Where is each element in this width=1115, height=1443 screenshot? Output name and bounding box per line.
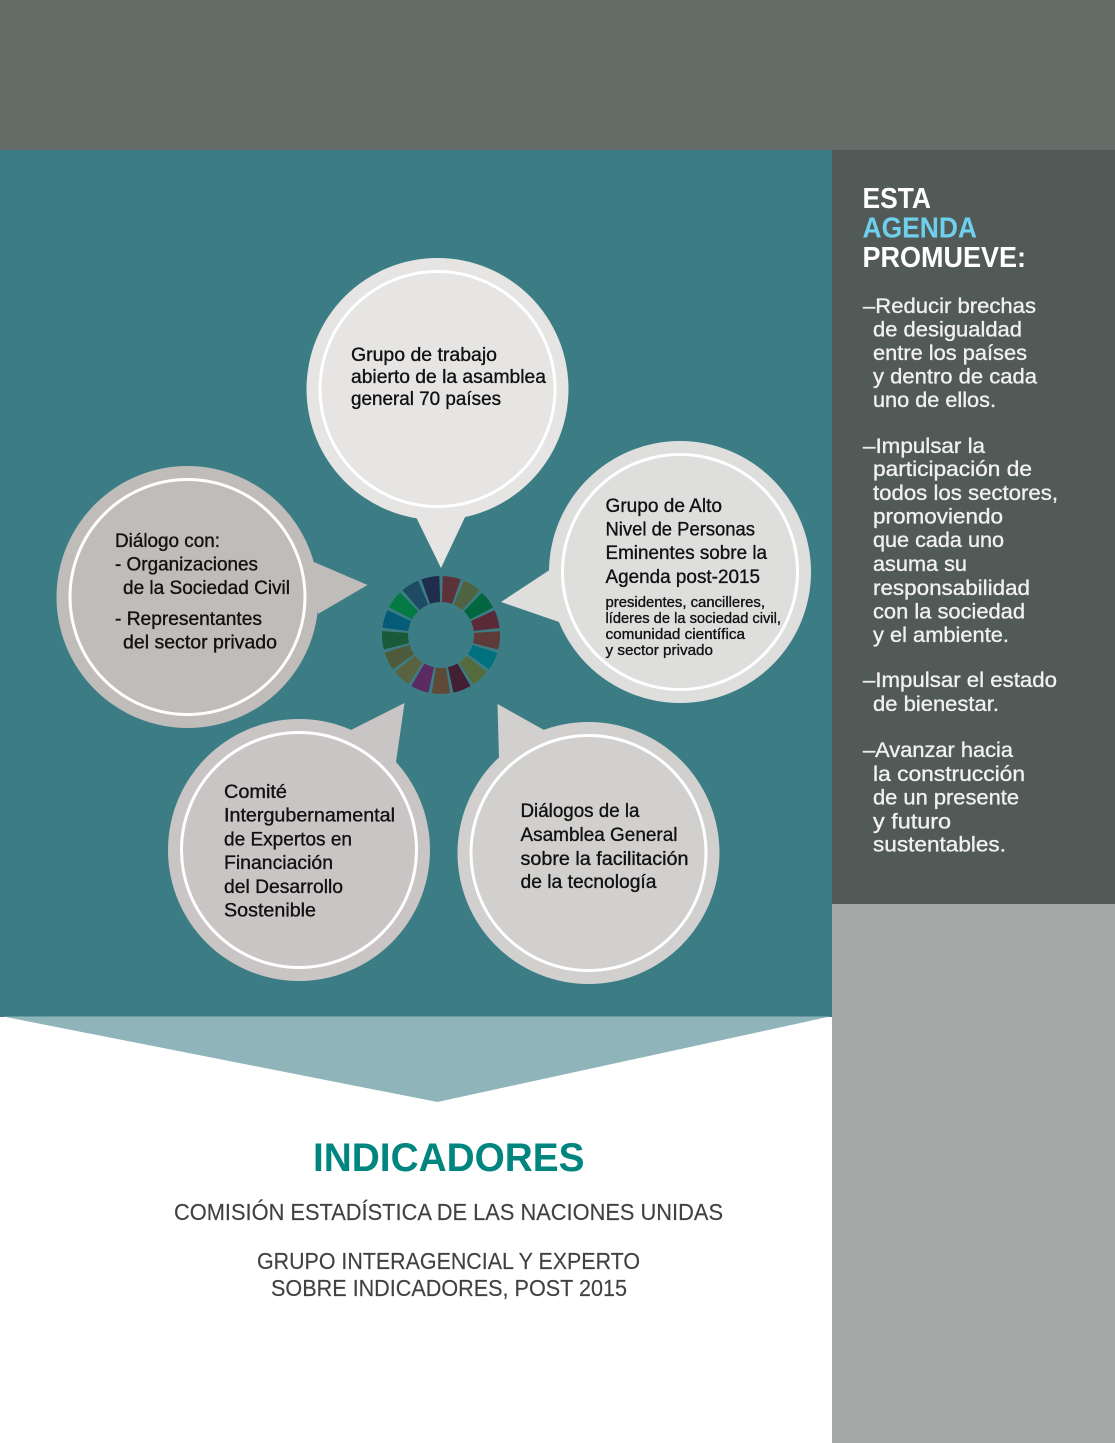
lower right grey panel <box>832 904 1115 1443</box>
sidebar item: avanzar hacia: –Avanzar hacia <box>863 738 1013 762</box>
sidebar item: impulsar la participacion: participación de <box>873 457 1032 481</box>
sidebar item: impulsar el estado: de bienestar. <box>873 692 999 716</box>
sidebar item: impulsar la participacion <box>863 434 1058 647</box>
sidebar item: avanzar hacia: la construcción <box>873 762 1025 786</box>
sidebar item: impulsar la participacion: responsabilidad <box>873 576 1030 600</box>
text: dialogos de la asamblea general: de la tecnología <box>520 871 657 893</box>
text: dialogos de la asamblea general: Diálogos de la <box>520 800 640 822</box>
text: comite intergubernamental: Sostenible <box>224 900 316 922</box>
sidebar item: impulsar la participacion: promoviendo <box>873 504 1003 528</box>
text: grupo interagencial: SOBRE INDICADORES, POST 2015 <box>271 1275 627 1301</box>
top band <box>0 0 1115 150</box>
text: dialogo con: - Organizaciones <box>115 554 258 576</box>
text: grupo de trabajo: Grupo de trabajo <box>351 344 497 366</box>
sidebar item: reducir brechas: –Reducir brechas <box>863 294 1036 318</box>
sidebar item: impulsar la participacion: asuma su <box>873 552 967 576</box>
text: dialogo con <box>115 530 290 654</box>
sidebar item: impulsar la participacion: –Impulsar la <box>863 434 985 458</box>
sidebar item: impulsar la participacion: con la sociedad <box>873 600 1025 624</box>
sidebar heading: PROMUEVE: <box>862 242 1026 274</box>
sidebar item: impulsar el estado <box>863 668 1057 716</box>
arrow: downward triangle <box>3 1016 830 1102</box>
sidebar item: avanzar hacia: de un presente <box>873 786 1019 810</box>
sidebar panel: esta agenda promueve <box>832 150 1115 904</box>
sidebar item: avanzar hacia: sustentables. <box>873 832 1006 856</box>
sidebar item: reducir brechas <box>863 294 1037 412</box>
text: dialogo con: - Representantes <box>115 608 262 630</box>
text: grupo de alto nivel members: presidentes, cancilleres, <box>606 594 765 611</box>
text: dialogos de la asamblea general <box>520 800 688 893</box>
text: dialogo con: del sector privado <box>123 632 277 654</box>
text: dialogos de la asamblea general: sobre la facilitación <box>520 848 688 870</box>
text: grupo de trabajo <box>351 344 546 410</box>
sidebar heading: ESTA <box>862 183 931 215</box>
heading: indicadores: INDICADORES <box>313 1136 584 1180</box>
sidebar heading <box>862 183 1026 274</box>
icon: sdg colour wheel <box>376 570 506 700</box>
sidebar item: reducir brechas: y dentro de cada <box>873 364 1037 388</box>
text: grupo de alto nivel title: Eminentes sobre la <box>606 542 767 564</box>
teal main panel <box>0 150 832 1017</box>
text: grupo de trabajo: general 70 países <box>351 388 501 410</box>
sidebar item: reducir brechas: de desigualdad <box>873 318 1022 342</box>
text: comision estadistica: COMISIÓN ESTADÍSTICA DE LAS NACIONES UNIDAS <box>174 1199 723 1225</box>
text: grupo interagencial: GRUPO INTERAGENCIAL Y EXPERTO <box>257 1248 640 1274</box>
text: comite intergubernamental: del Desarrollo <box>224 876 343 898</box>
sidebar item: avanzar hacia <box>863 738 1025 856</box>
sidebar item: impulsar la participacion: y el ambiente. <box>873 623 1009 647</box>
bubble: grupo de alto nivel <box>501 441 811 703</box>
text: comite intergubernamental: de Expertos en <box>224 828 352 850</box>
bubble: comite intergubernamental <box>168 703 430 981</box>
text: grupo de alto nivel members: comunidad científica <box>606 626 746 643</box>
text: comite intergubernamental: Comité <box>224 781 287 803</box>
text: dialogo con: de la Sociedad Civil <box>123 577 290 599</box>
text: comite intergubernamental: Intergubernamental <box>224 804 395 826</box>
text: grupo de trabajo: abierto de la asamblea <box>351 366 546 388</box>
bubble: dialogos de la asamblea general <box>458 704 720 984</box>
text: grupo de alto nivel members <box>606 594 781 659</box>
text: dialogo con: Diálogo con: <box>115 530 220 552</box>
bubble: dialogo con <box>56 466 368 728</box>
text: grupo de alto nivel title: Nivel de Personas <box>606 518 755 540</box>
text: grupo de alto nivel members: líderes de la sociedad civil, <box>606 610 781 627</box>
sidebar item: impulsar la participacion: que cada uno <box>873 528 1004 552</box>
text: grupo de alto nivel title: Grupo de Alto <box>606 495 722 517</box>
sidebar heading: AGENDA <box>862 212 977 244</box>
text: grupo de alto nivel title <box>606 495 767 588</box>
sidebar item: reducir brechas: uno de ellos. <box>873 388 996 412</box>
text: comite intergubernamental: Financiación <box>224 852 333 874</box>
text: grupo de alto nivel members: y sector privado <box>606 642 713 659</box>
bubble: grupo de trabajo <box>306 258 568 568</box>
sidebar item: reducir brechas: entre los países <box>873 341 1027 365</box>
sidebar item: impulsar el estado: –Impulsar el estado <box>863 668 1057 692</box>
sidebar item: avanzar hacia: y futuro <box>873 810 951 834</box>
text: grupo interagencial <box>257 1248 640 1301</box>
text: grupo de alto nivel title: Agenda post-2015 <box>606 566 760 588</box>
text: dialogos de la asamblea general: Asamblea General <box>520 824 678 846</box>
text: comite intergubernamental <box>224 781 395 922</box>
sidebar item: impulsar la participacion: todos los sectores, <box>873 481 1058 505</box>
